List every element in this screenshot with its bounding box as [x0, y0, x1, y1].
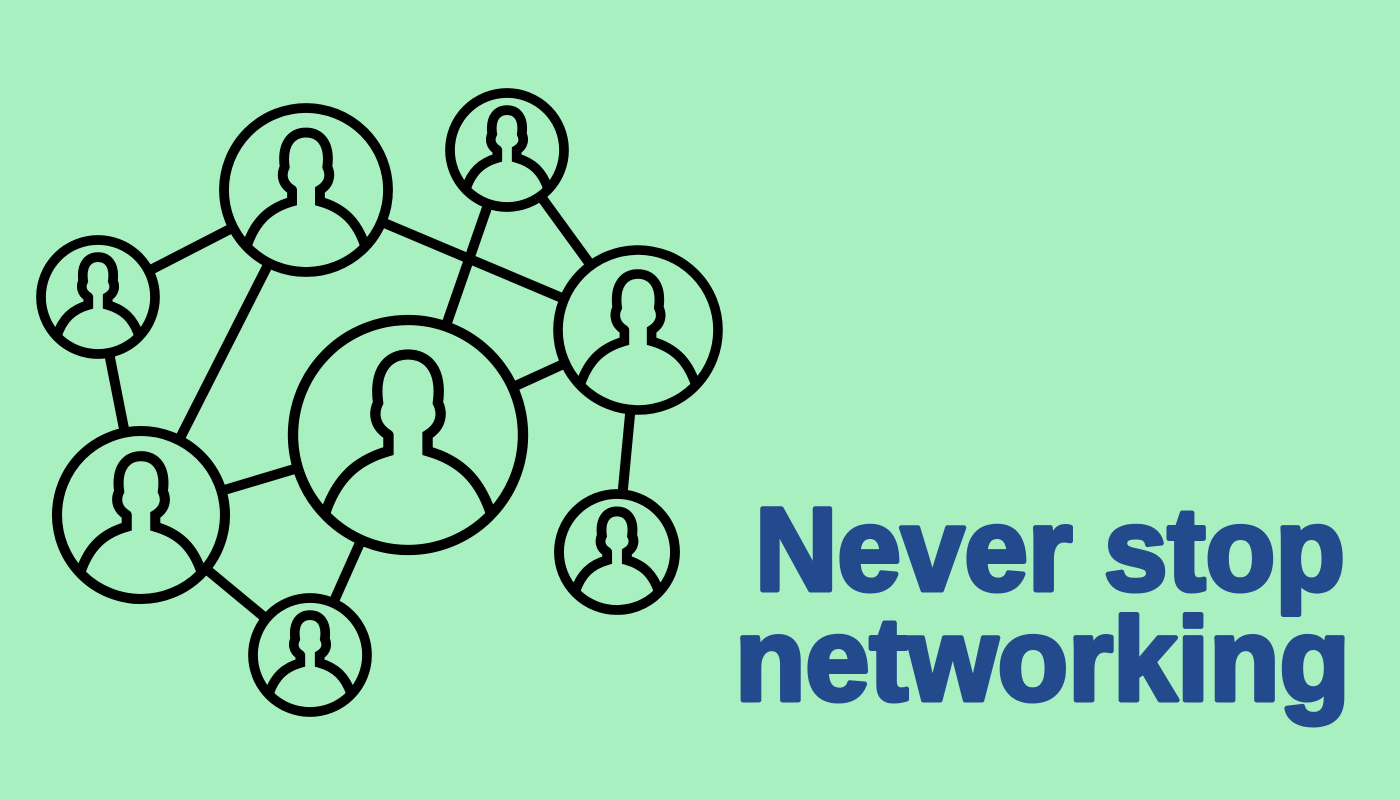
title text: networking — [735, 594, 1350, 726]
node: center large — [293, 320, 523, 550]
title text: Never stop — [755, 484, 1345, 616]
node: left small — [41, 240, 155, 354]
node: left lower — [57, 431, 225, 599]
node: right — [558, 250, 718, 410]
connection lines — [98, 150, 638, 655]
title text — [735, 484, 1350, 726]
node: top right small — [450, 93, 564, 207]
network diagram — [41, 93, 718, 712]
node: bottom small — [253, 598, 367, 712]
node: right lower small — [559, 494, 675, 610]
node: top center — [224, 108, 388, 272]
